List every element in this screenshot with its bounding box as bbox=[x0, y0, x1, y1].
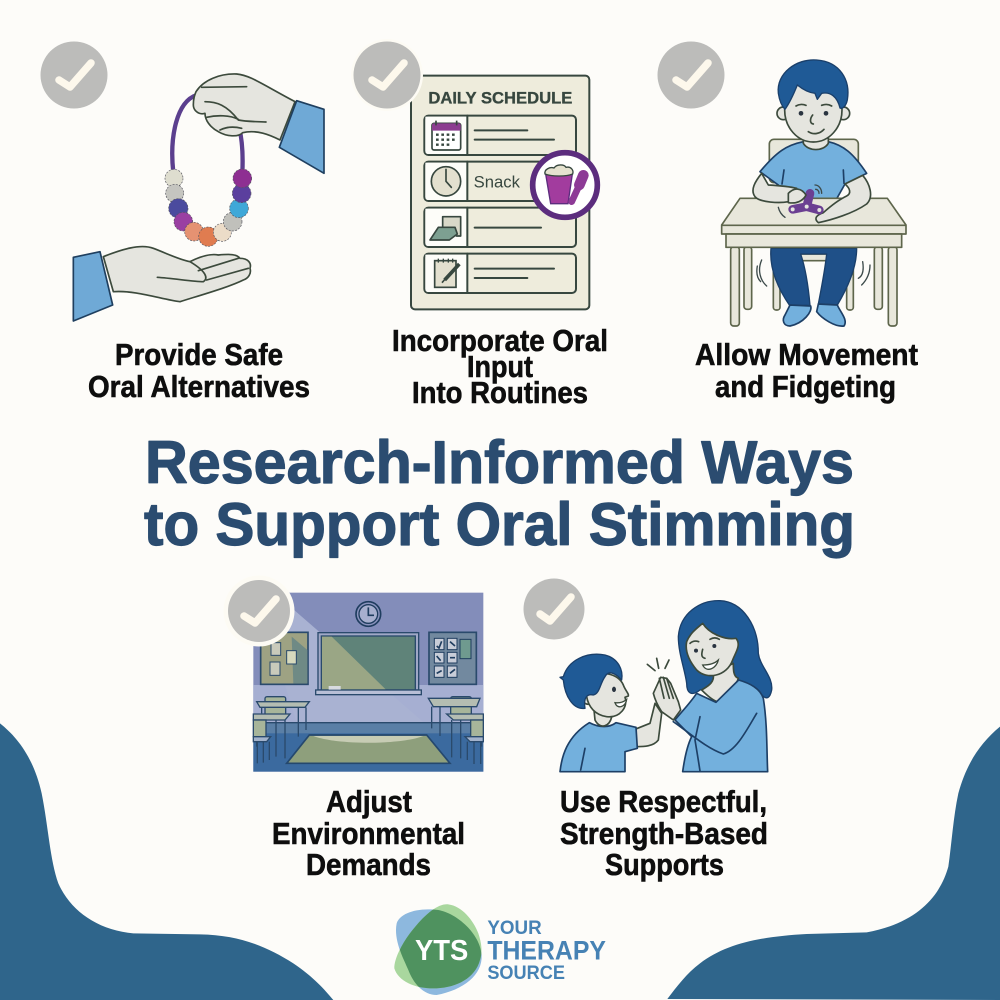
classroom wall bbox=[253, 593, 483, 772]
arms bbox=[753, 173, 871, 223]
schedule heading: DAILY SCHEDULE bbox=[428, 88, 572, 107]
label: respectful strength-based supports bbox=[560, 784, 768, 882]
logo wordmark: YOUR bbox=[487, 918, 542, 939]
label: adjust environmental demands: Demands bbox=[306, 847, 431, 882]
chalkboard bbox=[316, 633, 421, 695]
icon: check badge bbox=[524, 578, 584, 640]
motion marks bbox=[757, 185, 870, 286]
label: respectful strength-based supports: Strength-Based bbox=[560, 816, 768, 851]
child bbox=[560, 654, 662, 772]
schedule row: snack: Snack bbox=[474, 173, 521, 192]
logo wordmark bbox=[487, 918, 606, 984]
torso bbox=[760, 142, 867, 202]
logo wordmark: SOURCE bbox=[487, 963, 565, 984]
label: incorporate oral input into routines: Into Routines bbox=[412, 375, 588, 410]
panel: movement and fidgeting bbox=[658, 42, 918, 404]
icon: check badge bbox=[351, 39, 423, 111]
head bbox=[777, 60, 850, 150]
illustration: classroom bbox=[253, 593, 483, 772]
chart board bbox=[429, 632, 476, 684]
background wave: bottom left bbox=[0, 723, 333, 1000]
illustration: hands and chew necklace bbox=[73, 74, 324, 321]
panel: environmental demands bbox=[224, 576, 483, 882]
icon: check badge bbox=[224, 576, 294, 646]
table legs bbox=[731, 247, 897, 326]
label: adjust environmental demands: Environmental bbox=[272, 816, 465, 851]
logo mark bbox=[394, 904, 482, 995]
label: incorporate oral input into routines bbox=[392, 323, 608, 410]
label: respectful strength-based supports: Supports bbox=[605, 847, 724, 882]
label: allow movement and fidgeting: and Fidgeting bbox=[715, 369, 896, 404]
desks left bbox=[253, 697, 309, 763]
bulletin board bbox=[261, 632, 308, 684]
logo wordmark: THERAPY bbox=[487, 935, 606, 965]
label: adjust environmental demands: Adjust bbox=[326, 784, 412, 819]
rug bbox=[287, 735, 450, 763]
title: Research-Informed Ways bbox=[145, 429, 854, 496]
label: adjust environmental demands bbox=[272, 784, 465, 882]
label: allow movement and fidgeting: Allow Movement bbox=[695, 337, 918, 372]
panel: oral input into routines bbox=[351, 39, 608, 410]
logo mark: YTS bbox=[415, 935, 468, 967]
schedule row: calendar bbox=[424, 116, 576, 155]
icon: upper hand bbox=[193, 74, 324, 173]
label: incorporate oral input into routines: Incorporate Oral bbox=[392, 323, 608, 358]
panel: safe oral alternatives bbox=[40, 42, 324, 404]
icon: fidget spinner bbox=[788, 189, 821, 212]
adult bbox=[673, 601, 772, 772]
illustration: high five bbox=[560, 601, 772, 772]
icon: lower hand bbox=[73, 247, 250, 321]
schedule row: notepad bbox=[424, 254, 576, 293]
table top bbox=[722, 198, 906, 247]
label: incorporate oral input into routines: Input bbox=[467, 349, 533, 384]
icon: meeting hands bbox=[653, 677, 681, 720]
icon: necklace beads bbox=[165, 169, 252, 246]
label: respectful strength-based supports: Use Respectful, bbox=[560, 784, 767, 819]
pants bbox=[771, 248, 857, 326]
label: allow movement and fidgeting bbox=[695, 337, 918, 404]
chair bbox=[769, 139, 858, 310]
title: to Support Oral Stimming bbox=[144, 491, 855, 558]
label: provide safe oral alternatives bbox=[88, 337, 310, 404]
desks right bbox=[428, 697, 483, 764]
title bbox=[144, 429, 855, 558]
background wave: bottom right bbox=[667, 727, 1000, 1000]
logo bbox=[394, 904, 606, 995]
icon: clap sparks bbox=[647, 658, 669, 671]
schedule row: laptop bbox=[424, 208, 576, 247]
label: provide safe oral alternatives: Provide Safe bbox=[115, 337, 283, 372]
illustration: boy at desk with spinner bbox=[722, 60, 906, 326]
schedule row: snack bbox=[424, 162, 576, 201]
icon: check badge bbox=[40, 42, 108, 108]
illustration: daily schedule bbox=[411, 76, 597, 309]
label: provide safe oral alternatives: Oral Alternatives bbox=[88, 369, 310, 404]
panel: respectful supports bbox=[524, 578, 772, 882]
icon: check badge bbox=[658, 42, 724, 108]
icon: necklace cord bbox=[172, 95, 243, 173]
clock bbox=[356, 602, 381, 626]
floor bbox=[253, 723, 483, 772]
icon: snack and chewy tool badge bbox=[533, 153, 597, 217]
